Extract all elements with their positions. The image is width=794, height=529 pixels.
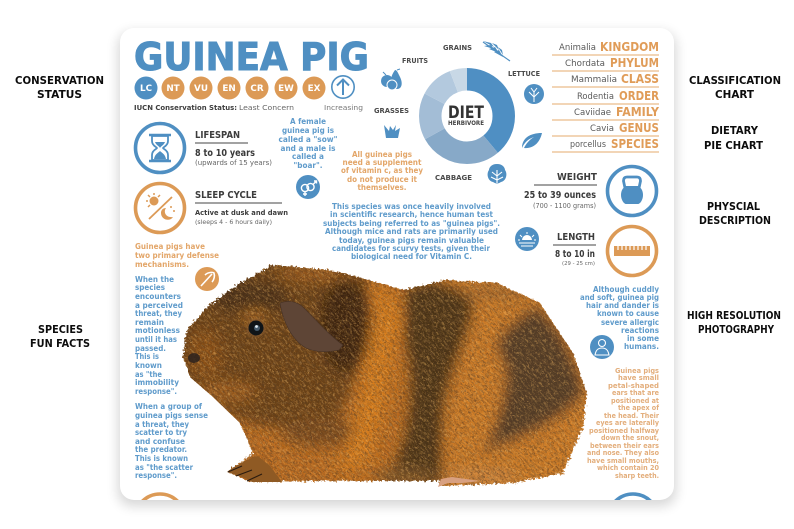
species fun facts side label: SPECIES bbox=[38, 324, 83, 336]
classification chart: PHYLUM bbox=[610, 56, 659, 70]
guinea pig hind toes bbox=[438, 477, 480, 487]
text: sow and boar fact: A female bbox=[290, 117, 326, 126]
text: allergy fact: hair and dander is bbox=[586, 301, 660, 310]
icon: weight kettlebell bbox=[608, 166, 656, 216]
classification chart: Cavia bbox=[590, 124, 614, 134]
conservation status badges: LC bbox=[140, 84, 152, 94]
text: anatomy fact: petal-shaped bbox=[608, 382, 659, 390]
text: immobility response: species bbox=[135, 283, 165, 292]
text: immobility response: immobility bbox=[135, 378, 179, 387]
species fun facts side label: FUN FACTS bbox=[30, 338, 90, 350]
text: scientific research fact: subjects being referred to as "guinea pigs". bbox=[323, 219, 500, 228]
text: immobility response bbox=[135, 275, 183, 396]
diet labels: CABBAGE bbox=[435, 174, 472, 182]
weight text: (700 - 1100 grams) bbox=[533, 201, 596, 210]
guinea pig front paw bbox=[227, 456, 282, 482]
text: scientific research fact: candidates for scurvy tests, given their bbox=[332, 244, 490, 253]
text: immobility response: as "the bbox=[135, 370, 162, 379]
text: vitamin c fact: of vitamin c, as they bbox=[341, 166, 423, 175]
sleep cycle text: SLEEP CYCLE bbox=[195, 190, 257, 201]
guinea pig photograph bbox=[182, 264, 588, 487]
text: allergy fact: and soft, guinea pig bbox=[580, 293, 659, 302]
text: anatomy fact: eyes are laterally bbox=[596, 419, 659, 427]
text: anatomy fact: have small bbox=[618, 374, 659, 382]
IUCN conservation status text: IUCN Conservation Status: bbox=[134, 104, 237, 112]
text: scientific research fact: This species was once heavily involved bbox=[332, 202, 491, 211]
text: immobility response: known bbox=[135, 361, 162, 370]
length text: (29 - 25 cm) bbox=[562, 261, 595, 267]
icon: grasses bbox=[384, 125, 400, 138]
weight text bbox=[524, 172, 597, 210]
text: vitamin c fact: All guinea pigs bbox=[352, 150, 413, 159]
text: anatomy fact: which contain 20 bbox=[597, 464, 659, 472]
cropped circle icons at the bottom edge bbox=[141, 492, 652, 500]
classification chart: FAMILY bbox=[616, 105, 659, 119]
conservation status side label: CONSERVATION bbox=[15, 75, 104, 87]
text: anatomy fact: Guinea pigs bbox=[615, 367, 659, 375]
classification chart: SPECIES bbox=[611, 137, 659, 151]
text: allergy fact: known to cause bbox=[597, 309, 659, 318]
text: anatomy fact: and nose. They also bbox=[587, 449, 659, 457]
text: sow and boar fact: guinea pig is bbox=[282, 126, 335, 135]
title: GUINEA PIG bbox=[134, 35, 369, 80]
text: anatomy fact: ears that are bbox=[612, 389, 659, 397]
diet labels: GRAINS bbox=[443, 44, 472, 52]
text: scatter response: When a group of bbox=[135, 402, 203, 411]
text: immobility response: motionless bbox=[135, 326, 181, 335]
guinea pig ear bbox=[280, 301, 343, 352]
text: anatomy fact: between their ears bbox=[590, 442, 659, 450]
text: scientific research fact: today, guinea pigs remain valuable bbox=[339, 236, 484, 245]
high resolution photography side label bbox=[687, 310, 781, 336]
length text: 8 to 10 in bbox=[555, 249, 595, 260]
icon: grain bbox=[483, 41, 510, 61]
diet labels bbox=[374, 44, 540, 182]
text: allergy fact: Although cuddly bbox=[593, 285, 659, 294]
guinea pig nose bbox=[188, 353, 200, 363]
conservation status badges bbox=[134, 76, 326, 100]
lifespan text: 8 to 10 years bbox=[195, 148, 255, 159]
conservation status badges: NT bbox=[166, 84, 180, 94]
icon: cabbage bbox=[488, 164, 506, 184]
lifespan text: (upwards of 15 years) bbox=[195, 158, 272, 167]
icon: defense shield bbox=[195, 267, 219, 291]
weight text: WEIGHT bbox=[557, 172, 597, 183]
icon: length ruler bbox=[608, 226, 656, 276]
classification chart: Caviidae bbox=[574, 108, 611, 118]
sleep cycle text bbox=[195, 190, 288, 226]
classification chart: CLASS bbox=[621, 72, 659, 86]
dietary pie chart side label: PIE CHART bbox=[704, 140, 764, 152]
classification chart bbox=[552, 40, 659, 152]
text: scatter response: a threat, they bbox=[135, 420, 189, 429]
conservation status badges: EW bbox=[278, 84, 294, 94]
species fun facts side label bbox=[30, 324, 90, 350]
classification chart: Rodentia bbox=[577, 92, 614, 102]
text: immobility response: When the bbox=[135, 275, 174, 284]
classification chart: Animalia bbox=[559, 43, 596, 53]
conservation status side label: STATUS bbox=[37, 89, 82, 101]
text: scatter response: response". bbox=[135, 471, 177, 480]
diet pie chart: HERBIVORE bbox=[448, 120, 484, 127]
sleep cycle text: Active at dusk and dawn bbox=[195, 208, 288, 217]
icon: lifespan hourglass bbox=[136, 124, 184, 172]
classification chart: Mammalia bbox=[571, 75, 617, 85]
text: anatomy fact: have small mouths, bbox=[587, 457, 659, 465]
text: defense mechanisms intro: two primary defense bbox=[135, 251, 219, 260]
lifespan text bbox=[195, 130, 272, 167]
classification chart: Chordata bbox=[565, 59, 605, 69]
text: scatter response bbox=[135, 402, 208, 480]
conservation status badges: EN bbox=[222, 84, 236, 94]
diet pie chart: DIET bbox=[448, 103, 485, 122]
conservation status side label bbox=[15, 75, 104, 101]
poster card bbox=[118, 28, 676, 506]
text: scientific research fact: Although mice and rats are primarily used bbox=[325, 227, 498, 236]
icon: sunrise bbox=[515, 227, 539, 251]
text: anatomy fact: positioned halfway bbox=[589, 427, 659, 435]
classification chart side label: CHART bbox=[715, 89, 755, 101]
IUCN conservation status text: Least Concern bbox=[239, 104, 294, 112]
diet labels: GRASSES bbox=[374, 107, 409, 115]
text: scientific research fact bbox=[323, 202, 500, 261]
diet pie chart bbox=[430, 79, 504, 153]
physical description side label bbox=[699, 201, 771, 227]
text: allergy fact: in some bbox=[627, 334, 659, 343]
classification chart side label: CLASSIFICATION bbox=[689, 75, 781, 87]
lifespan text: LIFESPAN bbox=[195, 130, 240, 141]
classification chart: KINGDOM bbox=[600, 40, 659, 54]
text: immobility response: until it has bbox=[135, 335, 177, 344]
icon: gender symbols bbox=[296, 175, 320, 199]
text: anatomy fact: the apex of bbox=[618, 404, 660, 412]
classification chart side label bbox=[689, 75, 781, 101]
sleep cycle text: (sleeps 4 - 6 hours daily) bbox=[195, 218, 272, 226]
dietary pie chart side label bbox=[704, 125, 764, 152]
dietary pie chart side label: DIETARY bbox=[711, 125, 758, 137]
physical description side label: PHYSCIAL bbox=[707, 201, 760, 213]
text: allergy fact: humans. bbox=[624, 342, 659, 351]
text: scatter response: This is known bbox=[135, 454, 188, 463]
text: vitamin c fact: themselves. bbox=[358, 183, 407, 192]
text: immobility response: threat, they bbox=[135, 309, 182, 318]
icon: allergy person bbox=[590, 335, 614, 359]
text: allergy fact: severe allergic bbox=[601, 318, 659, 327]
classification chart: GENUS bbox=[619, 121, 659, 135]
icon: population trend arrow bbox=[332, 76, 354, 98]
weight text: 25 to 39 ounces bbox=[524, 190, 596, 201]
text: sow and boar fact bbox=[278, 117, 338, 170]
high resolution photography side label: HIGH RESOLUTION bbox=[687, 310, 781, 322]
conservation status badges: VU bbox=[194, 84, 208, 94]
text: immobility response: remain bbox=[135, 318, 164, 327]
text: defense mechanisms intro: mechanisms. bbox=[135, 260, 189, 269]
text: immobility response: encounters bbox=[135, 292, 182, 301]
text: anatomy fact: the head. Their bbox=[604, 412, 660, 420]
text: vitamin c fact: need a supplement bbox=[342, 158, 422, 167]
text: sow and boar fact: "boar". bbox=[294, 161, 323, 170]
high resolution photography side label: PHOTOGRAPHY bbox=[698, 324, 774, 336]
text: scientific research fact: in scientific research, hence human test bbox=[330, 210, 493, 219]
text: vitamin c fact bbox=[341, 150, 423, 192]
IUCN conservation status text bbox=[134, 104, 294, 112]
icon: lettuce bbox=[524, 84, 544, 104]
text: scatter response: guinea pigs sense bbox=[135, 411, 208, 420]
text: sow and boar fact: called a bbox=[292, 152, 324, 161]
text: immobility response: passed. bbox=[135, 344, 166, 353]
guinea pig eye bbox=[246, 318, 266, 338]
text: defense mechanisms intro: Guinea pigs have bbox=[135, 242, 205, 251]
length text: LENGTH bbox=[557, 232, 595, 243]
diet labels: FRUITS bbox=[402, 57, 428, 65]
text: sow and boar fact: and a male is bbox=[280, 144, 336, 153]
text: scatter response: scatter to try bbox=[135, 428, 187, 437]
text: allergy fact: reactions bbox=[621, 326, 660, 335]
conservation status badges: EX bbox=[308, 84, 321, 94]
length text bbox=[553, 232, 596, 267]
text: scatter response: as "the scatter bbox=[135, 463, 193, 472]
text: scatter response: and confuse bbox=[135, 437, 185, 446]
classification chart: ORDER bbox=[619, 89, 659, 103]
conservation status badges: CR bbox=[250, 84, 264, 94]
icon: fruits bbox=[381, 69, 402, 90]
text: sow and boar fact: called a "sow" bbox=[278, 135, 338, 144]
text: vitamin c fact: do not produce it bbox=[347, 175, 417, 184]
icon: sleep cycle sun and moon bbox=[136, 184, 184, 232]
text: defense mechanisms intro bbox=[135, 242, 219, 269]
classification chart: porcellus bbox=[570, 140, 607, 150]
icon: leaf bbox=[522, 133, 542, 148]
text: immobility response: a perceived bbox=[135, 301, 183, 310]
diet labels: LETTUCE bbox=[508, 70, 540, 78]
text: anatomy fact: down the snout, bbox=[601, 434, 659, 442]
text: scientific research fact: biological need for Vitamin C. bbox=[351, 252, 472, 261]
population trend label: Increasing bbox=[324, 104, 363, 112]
physical description side label: DESCRIPTION bbox=[699, 215, 771, 227]
text: anatomy fact bbox=[587, 367, 660, 480]
text: immobility response: response". bbox=[135, 387, 177, 396]
text: anatomy fact: sharp teeth. bbox=[615, 472, 659, 480]
text: anatomy fact: positioned at bbox=[611, 397, 660, 405]
text: scatter response: the predator. bbox=[135, 445, 187, 454]
text: allergy fact bbox=[580, 285, 660, 351]
text: immobility response: This is bbox=[135, 352, 159, 361]
